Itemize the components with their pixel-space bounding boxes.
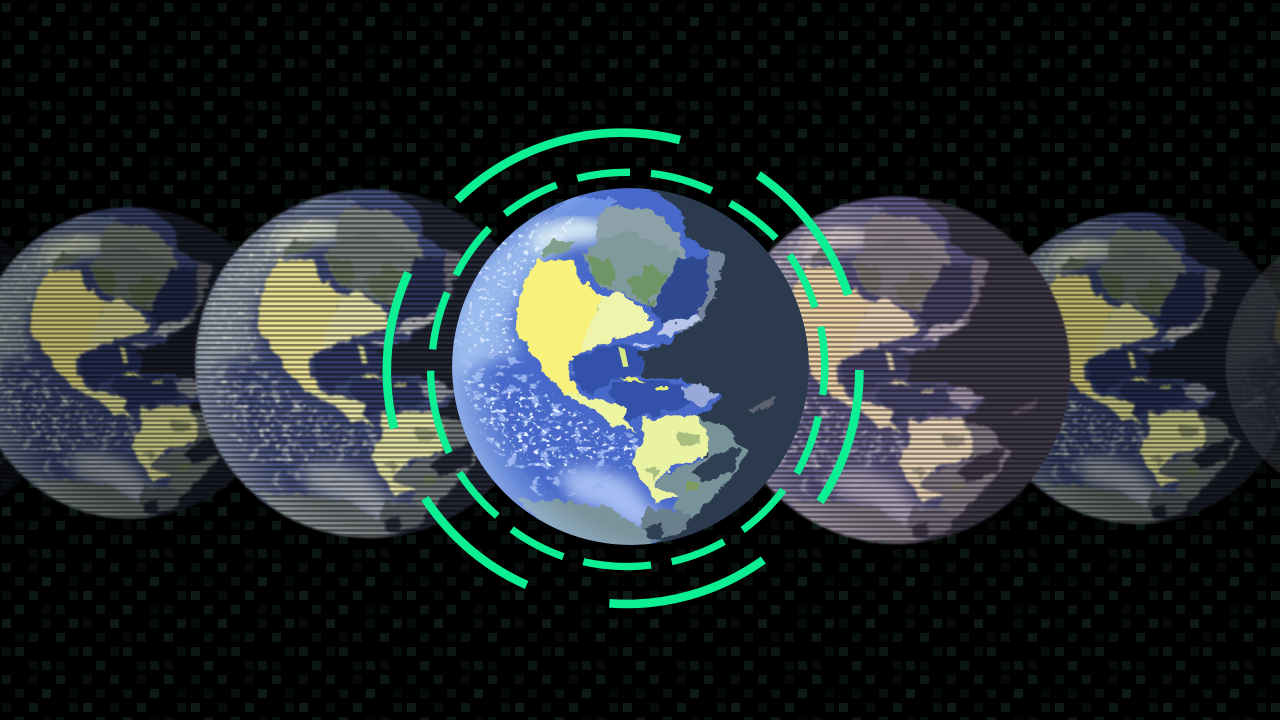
central earth globe	[450, 186, 816, 550]
globe: right of center	[721, 195, 1078, 548]
inner ring segments	[431, 172, 825, 567]
outer ring segments	[387, 133, 859, 604]
globe: left of center	[193, 188, 551, 542]
green dashed rings	[387, 133, 859, 604]
faint globe: far left	[0, 211, 75, 528]
globe: far left main	[0, 206, 292, 523]
globe: second from right	[981, 211, 1280, 528]
translucent globe: right edge	[1224, 229, 1280, 504]
